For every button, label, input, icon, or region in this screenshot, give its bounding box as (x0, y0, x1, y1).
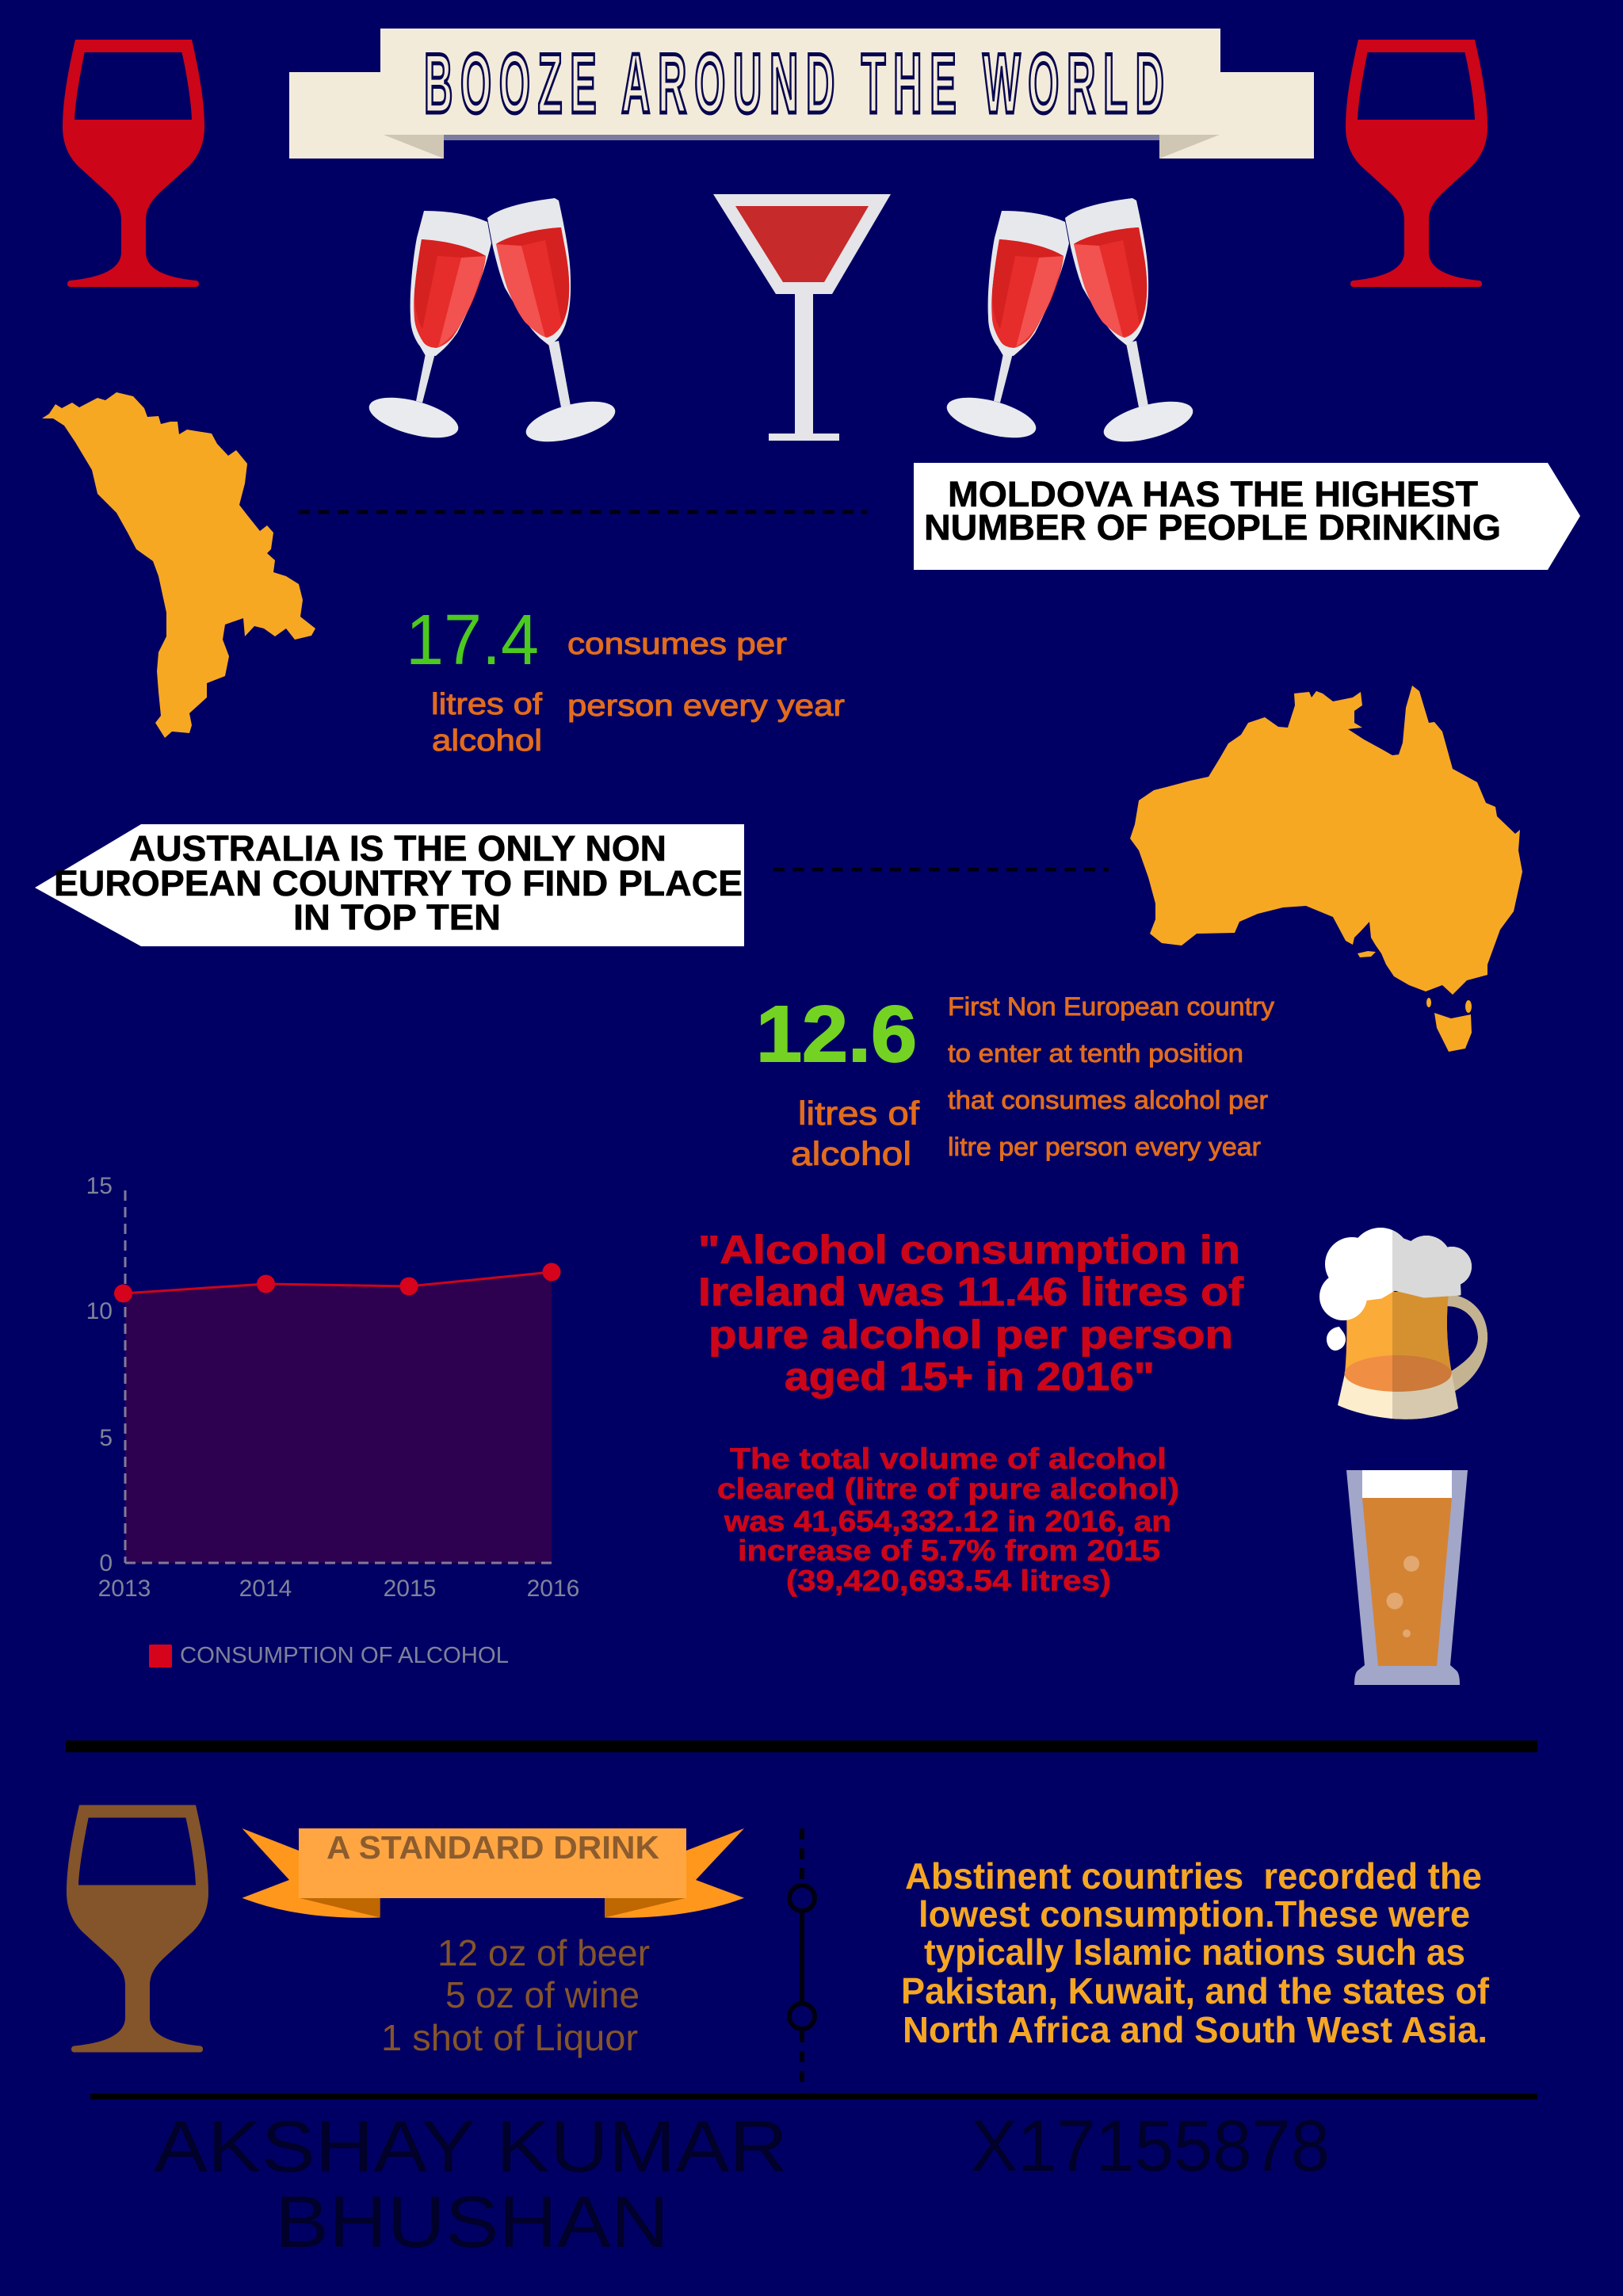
icon: clinking champagne flutes left (365, 198, 619, 449)
stat: Moldova 17.4 litres: consumes per (567, 628, 787, 661)
icon: brown wine glass (67, 1805, 208, 2053)
text block: total volume cleared: was 41,654,332.12 in 2016, an (724, 1505, 1171, 1538)
text block: abstinent countries: Pakistan, Kuwait, and the states of (901, 1970, 1490, 2011)
text block: total volume cleared: The total volume of alcohol (730, 1442, 1167, 1475)
area chart: consumption of alcohol: 0 (99, 1550, 113, 1576)
text block: Australia description: First Non European country (948, 992, 1274, 1021)
text block: standard drink measures: 1 shot of Liquor (381, 2017, 638, 2058)
text block: total volume cleared: cleared (litre of pure alcohol) (717, 1473, 1179, 1505)
area chart: consumption of alcohol: 2014 (239, 1576, 292, 1602)
callout arrow: Australia (35, 824, 744, 946)
icon: left red wine glass (63, 40, 204, 287)
text block: Australia description (948, 992, 1274, 1161)
icon: right red wine glass (1346, 40, 1487, 287)
callout arrow: Australia: EUROPEAN COUNTRY TO FIND PLACE (54, 863, 743, 904)
stat: Australia 12.6 litres (756, 990, 919, 1172)
text block: standard drink measures: 12 oz of beer (437, 1932, 650, 1973)
text block: abstinent countries: Abstinent countries recorded the (905, 1855, 1482, 1897)
stat: Moldova 17.4 litres: person every year (567, 690, 845, 723)
icon: beer mug (1319, 1228, 1487, 1419)
quote: Ireland consumption: Ireland was 11.46 litres of (698, 1270, 1243, 1314)
area chart: consumption of alcohol (86, 1173, 579, 1668)
stat: Australia 12.6 litres: litres of (798, 1095, 919, 1132)
callout arrow: Moldova (914, 463, 1580, 570)
stat: Moldova 17.4 litres: alcohol (432, 724, 542, 758)
text block: abstinent countries (901, 1855, 1490, 2050)
timeline connector (789, 1828, 815, 2087)
callout arrow: Australia: IN TOP TEN (293, 897, 501, 938)
area chart: consumption of alcohol: 2016 (527, 1576, 579, 1602)
icon: clinking champagne flutes right (943, 198, 1197, 449)
area chart: consumption of alcohol: 10 (86, 1298, 113, 1324)
text block: abstinent countries: North Africa and South West Asia. (903, 2009, 1487, 2050)
text block: Australia description: litre per person every year (948, 1133, 1261, 1161)
text block: standard drink measures: 5 oz of wine (445, 1974, 640, 2015)
ribbon: a standard drink (242, 1828, 744, 1918)
icon: martini glass (713, 194, 891, 441)
area chart: consumption of alcohol: 2013 (98, 1576, 151, 1602)
footer: author name (154, 2107, 788, 2263)
map: Moldova (42, 392, 315, 738)
stat: Moldova 17.4 litres: litres of (431, 688, 543, 721)
footer: author name: BHUSHAN (275, 2182, 669, 2263)
text block: total volume cleared (717, 1442, 1179, 1597)
title ribbon (289, 29, 1314, 159)
footer: author name: AKSHAY KUMAR (154, 2107, 788, 2187)
stat: Australia 12.6 litres: 12.6 (756, 990, 917, 1079)
quote: Ireland consumption: "Alcohol consumption in (698, 1228, 1240, 1272)
connector: Australia dotted line (773, 867, 1109, 872)
area chart: consumption of alcohol: 15 (86, 1173, 113, 1199)
quote: Ireland consumption (698, 1228, 1243, 1399)
title: BOOZE AROUND THE WORLD (424, 36, 1164, 131)
text block: Australia description: to enter at tenth position (948, 1039, 1243, 1068)
text block: total volume cleared: increase of 5.7% from 2015 (738, 1534, 1160, 1567)
text block: abstinent countries: typically Islamic nations such as (924, 1931, 1465, 1973)
quote: Ireland consumption: pure alcohol per person (708, 1312, 1233, 1357)
stat: Moldova 17.4 litres: 17.4 (406, 601, 539, 680)
callout arrow: Australia: AUSTRALIA IS THE ONLY NON (129, 828, 666, 869)
text block: total volume cleared: (39,420,693.54 litres) (786, 1564, 1111, 1597)
chart legend: CONSUMPTION OF ALCOHOL (180, 1643, 509, 1668)
quote: Ireland consumption: aged 15+ in 2016" (785, 1354, 1155, 1399)
divider (66, 1740, 1537, 1752)
connector: Moldova dotted line (299, 510, 867, 514)
footer: student id: X17155878 (971, 2106, 1330, 2187)
area chart: consumption of alcohol: 5 (99, 1425, 113, 1451)
divider (90, 2093, 1537, 2099)
map: Australia (1130, 686, 1522, 1052)
text block: abstinent countries: lowest consumption.These were (918, 1893, 1470, 1935)
stat: Moldova 17.4 litres (406, 601, 845, 758)
text block: standard drink measures (381, 1932, 650, 2058)
callout arrow: Moldova: NUMBER OF PEOPLE DRINKING (924, 507, 1501, 548)
stat: Australia 12.6 litres: alcohol (791, 1135, 911, 1172)
text block: Australia description: that consumes alcohol per (948, 1086, 1268, 1114)
area chart: consumption of alcohol: 2015 (384, 1576, 436, 1602)
icon: pint glass (1346, 1470, 1468, 1685)
ribbon: a standard drink: A STANDARD DRINK (327, 1829, 659, 1866)
callout arrow: Moldova: MOLDOVA HAS THE HIGHEST (948, 474, 1478, 514)
